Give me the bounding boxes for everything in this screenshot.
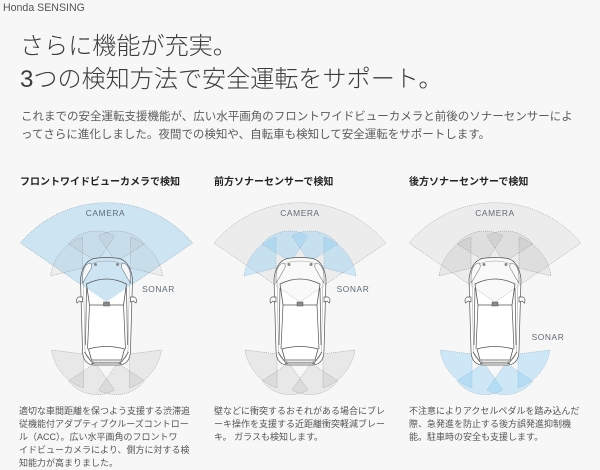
camera label: CAMERA — [280, 208, 320, 218]
front sonar zones — [439, 231, 551, 276]
heading: rear sonar: 後方ソナーセンサーで検知 — [409, 177, 528, 188]
panel: front wide view camera diagram — [20, 203, 192, 395]
camera fan — [214, 203, 386, 302]
brand label: Honda SENSING — [3, 2, 85, 14]
title: さらに機能が充実。 — [20, 33, 237, 60]
caption: rear sonar: 不注意によりアクセルペダルを踏み込んだ — [409, 406, 579, 416]
sonar label: SONAR — [337, 284, 369, 294]
rear sonar zones — [245, 350, 355, 395]
caption: front camera: 従機能付アダプティブクルーズコントロー — [19, 419, 189, 429]
caption: front camera: ル（ACC）。広い水平画角のフロントワ — [19, 432, 178, 442]
front sonar zones (active) — [244, 231, 356, 276]
camera label: CAMERA — [475, 208, 515, 218]
diagrams — [20, 202, 581, 395]
caption: front camera — [19, 406, 190, 468]
caption: rear sonar: 際、急発進を防止する後方誤発進抑制機 — [409, 419, 571, 429]
sonar label: SONAR — [532, 332, 564, 342]
caption: front camera: イドビューカメラにより、側方に対する検 — [19, 445, 189, 455]
caption: rear sonar: 能。駐車時の安全も支援します。 — [409, 432, 543, 442]
car — [76, 257, 137, 366]
caption: front sonar: キ。 ガラスも検知します。 — [214, 432, 323, 442]
caption: front camera: 適切な車間距離を保つよう支援する渋滞追 — [19, 406, 190, 416]
rear sonar zones (active) — [440, 350, 550, 395]
sonar label: SONAR — [142, 284, 175, 294]
heading: front sonar: 前方ソナーセンサーで検知 — [214, 177, 333, 188]
camera fan (active) — [20, 203, 192, 302]
title: 3つの検知方法で安全運転をサポート。 — [20, 66, 443, 93]
intro text: これまでの安全運転支援機能が、広い水平画角のフロントワイドビューカメラと前後のソナーセンサーによ — [21, 111, 573, 123]
car — [464, 257, 526, 366]
caption: front sonar: 壁などに衝突するおそれがある場合にブレ — [214, 406, 385, 416]
title — [20, 33, 443, 93]
camera label: CAMERA — [86, 208, 125, 218]
panel: front sonar diagram — [214, 203, 386, 395]
car — [270, 257, 330, 366]
front sonar zones — [50, 231, 162, 276]
caption: front sonar: ーキ操作を支援する近距離衝突軽減ブレー — [214, 419, 385, 429]
intro text: ってさらに進化しました。夜間での検知や、自転車も検知して安全運転をサポートします。 — [21, 129, 490, 141]
caption: front camera: 知能力が高まりました。 — [19, 458, 118, 468]
caption: front sonar — [214, 406, 385, 442]
rear sonar zones — [52, 350, 162, 395]
panel: rear sonar diagram — [409, 203, 581, 395]
intro text — [21, 110, 573, 141]
caption: rear sonar — [409, 406, 579, 442]
camera fan — [409, 203, 581, 302]
heading: front wide view camera: フロントワイドビューカメラで検知 — [20, 177, 180, 188]
